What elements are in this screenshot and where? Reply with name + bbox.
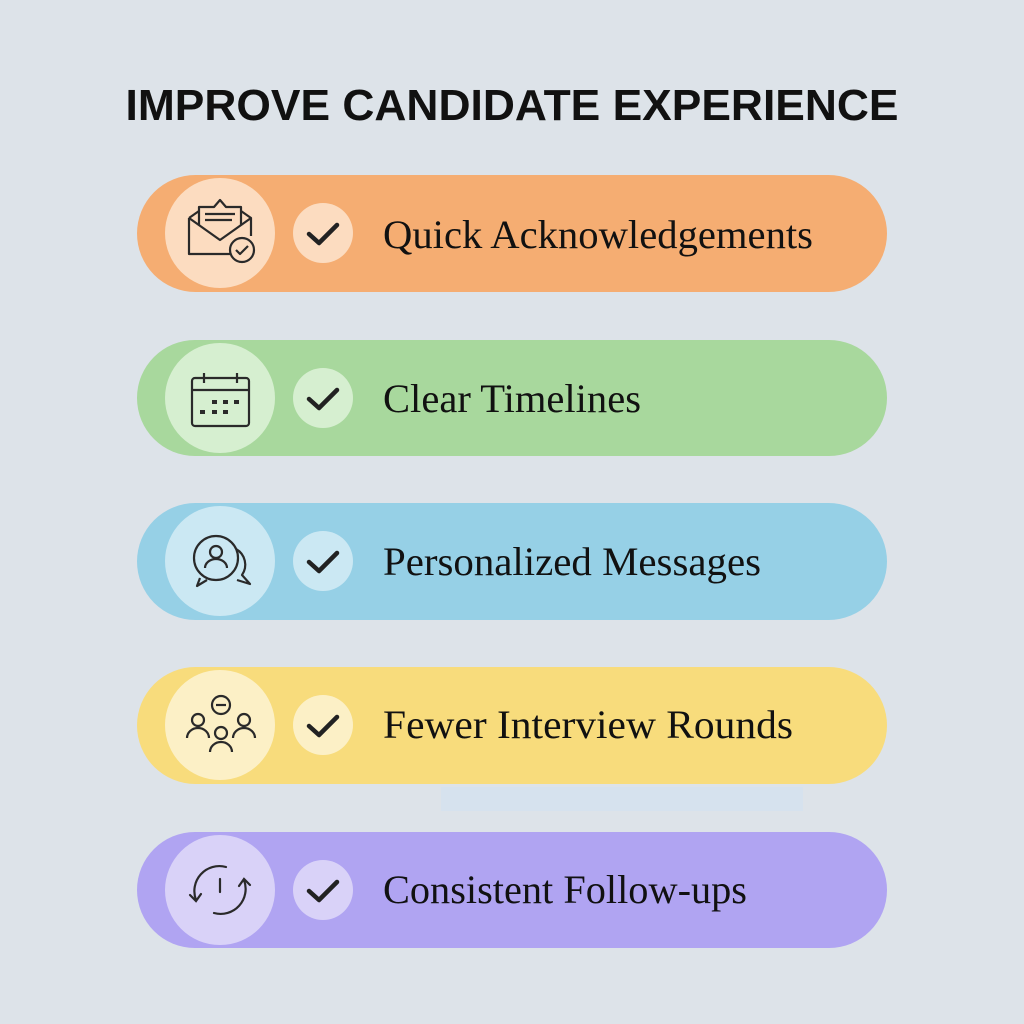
title: IMPROVE CANDIDATE EXPERIENCE [126, 81, 898, 130]
icon: calendar [192, 373, 249, 426]
icon: people [187, 696, 255, 752]
label: Personalized Messages [383, 539, 761, 584]
check badge [293, 531, 353, 591]
check badge [293, 695, 353, 755]
label: Consistent Follow-ups [383, 867, 747, 912]
label: Fewer Interview Rounds [383, 702, 793, 747]
panel: fewer interview rounds [137, 667, 887, 784]
label: Clear Timelines [383, 376, 641, 421]
icon: chat person [194, 536, 250, 586]
icon: envelope [189, 200, 254, 262]
panel: quick acknowledgements [137, 175, 887, 292]
label: Quick Acknowledgements [383, 212, 813, 257]
faint strip [441, 787, 803, 811]
panel: consistent follow-ups [137, 832, 887, 948]
panel: clear timelines [137, 340, 887, 456]
icon: cycle clock [190, 866, 250, 914]
panel: personalized messages [137, 503, 887, 620]
check badge [293, 368, 353, 428]
check badge [293, 203, 353, 263]
check badge [293, 860, 353, 920]
